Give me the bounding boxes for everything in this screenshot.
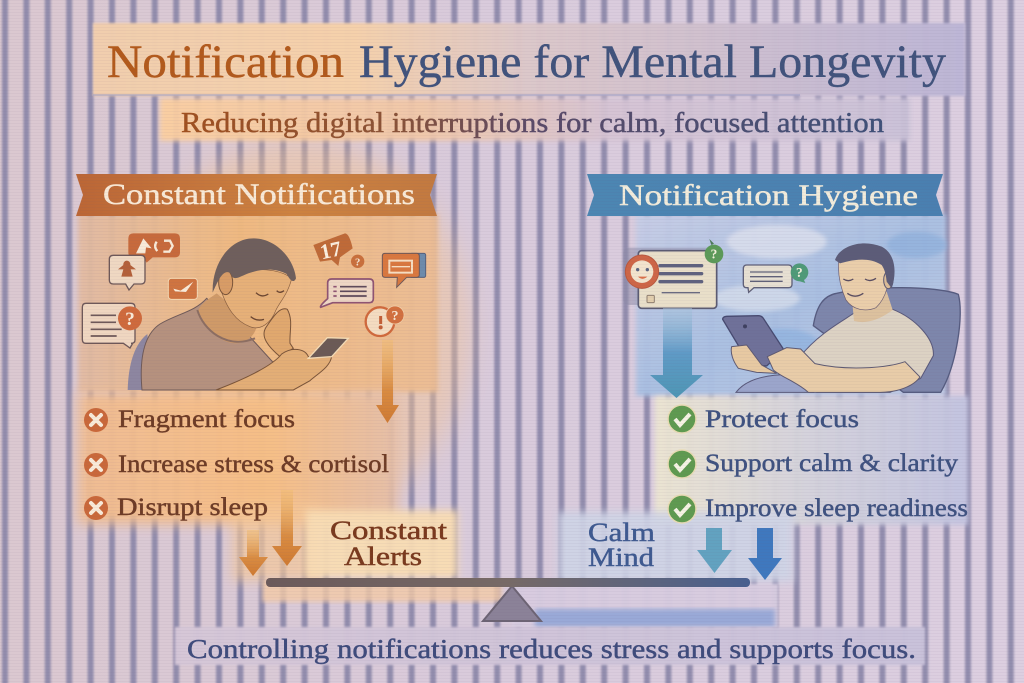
icon: message bubble with green badge bbox=[743, 263, 808, 292]
title: Hygiene for Mental Longevity bbox=[359, 36, 947, 88]
icon: small question bubble bbox=[351, 255, 364, 268]
ear bbox=[219, 270, 233, 295]
icon: orange and blue card bubble bbox=[382, 253, 426, 287]
right column banner: Notification Hygiene bbox=[619, 179, 918, 212]
phone bbox=[308, 338, 348, 358]
item: support calm: Support calm & clarity bbox=[705, 450, 959, 477]
label: constant alerts: Constant bbox=[330, 516, 448, 545]
title: Notification bbox=[107, 36, 344, 88]
item: fragment focus: Fragment focus bbox=[118, 406, 295, 433]
head bbox=[219, 269, 292, 328]
bullet list: negative effects bbox=[84, 406, 389, 521]
shirt bbox=[800, 309, 933, 392]
arrow: left column vertical down bbox=[376, 340, 399, 423]
item: disrupt sleep: Disrupt sleep bbox=[117, 494, 268, 521]
label: calm mind bbox=[588, 518, 655, 572]
face lines bbox=[843, 278, 876, 296]
fulcrum bbox=[483, 586, 541, 621]
icon: orange alert bubble bbox=[128, 233, 180, 263]
panel: glow behind arrows bbox=[232, 505, 322, 581]
title bbox=[107, 36, 947, 88]
arrow: large blue down bbox=[650, 308, 703, 398]
panel: warm glow behind left column bbox=[130, 140, 470, 520]
item: increase stress: Increase stress & cortisol bbox=[118, 451, 389, 478]
tablet bbox=[723, 316, 784, 366]
icon: notification card bbox=[623, 239, 723, 308]
left column banner bbox=[76, 174, 437, 216]
neck bbox=[198, 293, 257, 343]
arrow: orange down tall bbox=[272, 490, 302, 566]
panel: below beam right bbox=[512, 584, 778, 628]
arrow: teal down bbox=[697, 528, 732, 573]
illustration: stressed person with phone bbox=[128, 238, 348, 390]
panel: left bullet backing bbox=[78, 392, 398, 524]
clouds bbox=[713, 225, 947, 375]
item: protect focus bbox=[668, 405, 859, 433]
panel: right illustration backing bbox=[636, 214, 946, 396]
eye and mouth bbox=[251, 291, 284, 320]
label: constant alerts bbox=[330, 516, 448, 571]
label: constant alerts: Alerts bbox=[344, 542, 422, 571]
icon: purple list bubble bbox=[320, 279, 373, 307]
balance scale bbox=[266, 578, 750, 621]
illustration: calm person with tablet bbox=[713, 225, 960, 392]
ear bbox=[884, 271, 893, 289]
panel: title backing bbox=[93, 23, 965, 96]
panel: bottom takeaway backing bbox=[175, 627, 925, 665]
panel: subtitle backing bbox=[160, 98, 910, 141]
blue band under beam bbox=[535, 609, 775, 627]
icon: message bubble with question bbox=[82, 303, 142, 348]
icon: small check bubble bbox=[168, 278, 197, 299]
hair bbox=[835, 243, 895, 288]
neckline bbox=[197, 310, 255, 342]
hair bbox=[213, 238, 296, 293]
panel: left illustration backing bbox=[78, 214, 438, 392]
panel: right bullet backing bbox=[655, 396, 968, 525]
lap bbox=[736, 375, 813, 392]
label: calm mind: Calm bbox=[588, 518, 655, 547]
left column banner: Constant Notifications bbox=[103, 178, 415, 211]
icon: message bubble with question: ? bbox=[125, 309, 135, 330]
hand at face bbox=[264, 309, 293, 357]
item: improve sleep: Improve sleep readiness bbox=[705, 495, 968, 522]
item: protect focus: Protect focus bbox=[705, 406, 859, 433]
left hand bbox=[731, 345, 777, 373]
label: calm mind: Mind bbox=[588, 543, 654, 572]
forearm and right hand bbox=[767, 348, 920, 392]
armchair bbox=[813, 288, 960, 392]
icon: small question bubble: ? bbox=[355, 257, 360, 268]
icon: round alert with question: ? bbox=[391, 309, 398, 324]
panel: glow under beam bbox=[262, 580, 502, 602]
panel: constant alerts backing bbox=[306, 510, 458, 578]
icon: outlined figure bubble bbox=[109, 255, 145, 290]
icon: 17 badge bubble bbox=[313, 233, 353, 266]
bullet list: positive effects bbox=[668, 405, 968, 523]
icon: red face badge bbox=[625, 255, 659, 288]
icon: message bubble with green badge: ? bbox=[796, 265, 803, 280]
icon: green question badge: ? bbox=[711, 247, 717, 262]
forearm and hand bbox=[216, 349, 332, 390]
arrow: blue down bbox=[748, 528, 782, 580]
icon: 17 badge bubble: 17 bbox=[318, 236, 344, 264]
title rule bbox=[93, 94, 800, 96]
panel: calm mind backing bbox=[558, 512, 793, 582]
subtitle: Reducing digital interruptions for calm, focused attention bbox=[181, 108, 884, 139]
head bbox=[838, 255, 889, 310]
right column banner bbox=[587, 174, 943, 216]
takeaway text: Controlling notifications reduces stress and supports focus. bbox=[187, 634, 916, 664]
icon: round alert with question bbox=[366, 306, 404, 336]
chair bbox=[128, 334, 153, 390]
arrow: orange down short bbox=[239, 530, 268, 576]
shirt bbox=[141, 298, 278, 390]
beam bbox=[266, 578, 750, 587]
neck bbox=[853, 292, 893, 322]
